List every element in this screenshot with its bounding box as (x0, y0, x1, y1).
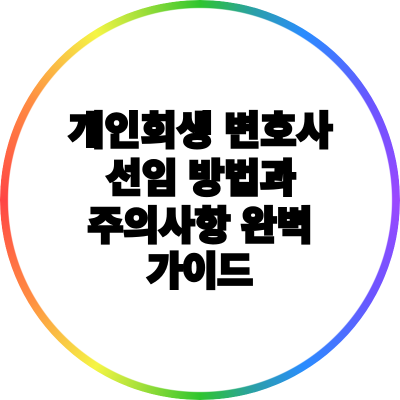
title line 4: 가이드 (147, 251, 253, 294)
title line 2: 선임 방법과 (106, 158, 296, 201)
title line 1: 개인회생 변호사 (68, 110, 333, 154)
title line 3: 주의사항 완벽 (88, 206, 312, 248)
